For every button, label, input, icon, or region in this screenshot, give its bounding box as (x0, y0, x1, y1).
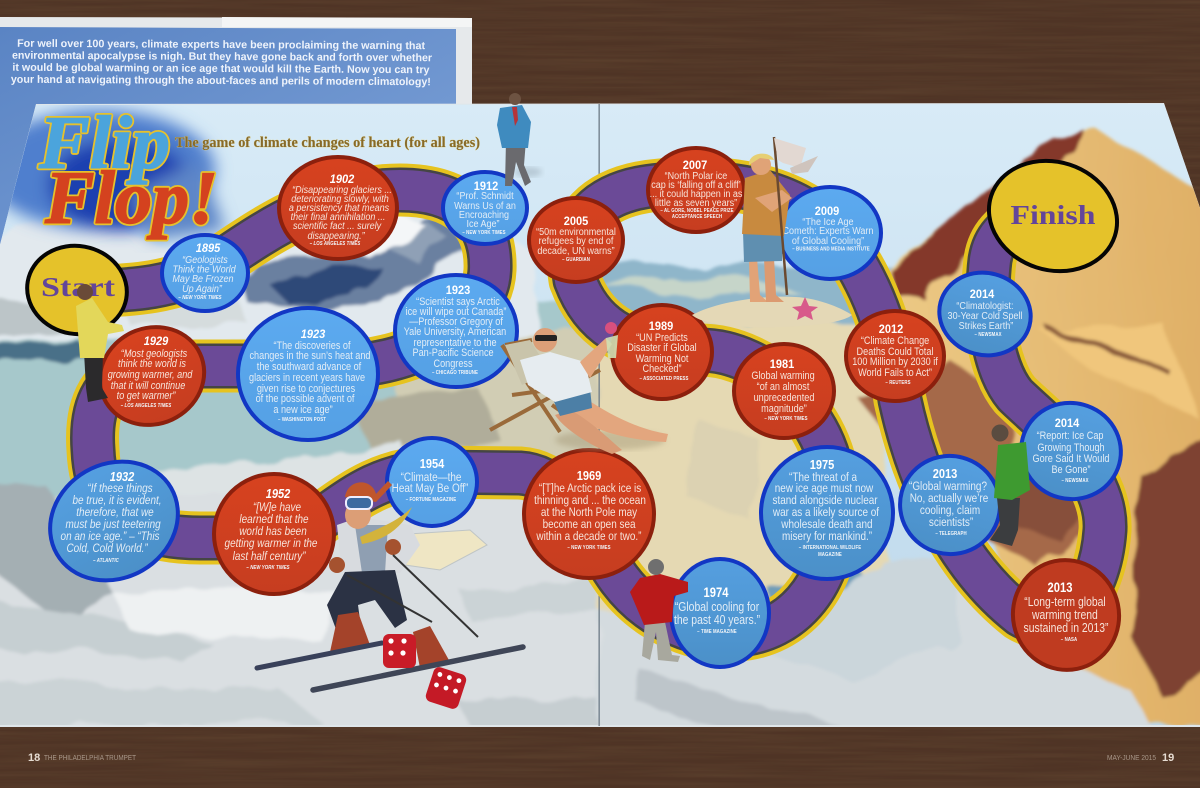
space: 1954: Heat May Be Off” (392, 482, 469, 495)
space: 1912: Ice Age” (466, 218, 500, 230)
space: 2013 cooling: cooling, claim (920, 504, 980, 517)
space: 2005: refugees by end of (539, 235, 614, 247)
space: 1923 lower: glaciers in recent years have (249, 372, 365, 384)
footer: right folio: MAY-JUNE 2015 (1107, 753, 1156, 762)
right page mountain (880, 130, 1200, 725)
space: 2009: “The Ice Age (802, 216, 854, 228)
space: 2013 cooling: 2013 (933, 466, 958, 481)
space: 2005: decade, UN warns” (537, 245, 615, 257)
space: 2014 cold spell: “Climatologist: (956, 300, 1014, 312)
space: 1975 (761, 447, 893, 579)
space: 1923 lower: – WASHINGTON POST (278, 417, 326, 422)
space: 2013 warming: sustained in 2013” (1024, 621, 1109, 635)
space: 2005: – GUARDIAN (562, 257, 590, 262)
space: 2012: “Climate Change (861, 335, 930, 347)
space: 1952: last half century” (233, 550, 307, 563)
space: 1975: new ice age must now (775, 482, 873, 495)
space: 2014 cold spell: 2014 (970, 289, 995, 301)
space: 1952: learned that the (239, 513, 309, 526)
space: 1902: – LOS ANGELES TIMES (310, 241, 361, 246)
space: 1952: 1952 (266, 486, 291, 501)
space: 1895: 1895 (196, 243, 221, 255)
space: 2007: “North Polar ice (665, 170, 727, 182)
space: 1932: on an ice age.” – “This (61, 530, 160, 543)
space: 1923 upper: —Professor Gregory of (409, 316, 503, 328)
space: 1923 lower: 1923 (301, 329, 326, 341)
space: 1989: 1989 (649, 321, 673, 333)
space: 1923 upper: 1923 (446, 285, 470, 297)
space: 1975: misery for mankind.” (782, 530, 872, 543)
space: 2014 ice cap: Be Gone” (1051, 464, 1091, 476)
space: 2014 ice cap (1010, 392, 1132, 510)
space: 2014 cold spell: Strikes Earth” (959, 320, 1013, 332)
space: 2009: – BUSINESS AND MEDIA INSTITUTE (792, 246, 870, 252)
introduction paragraph: your hand at navigating through the about-faces and perils of modern climatology! (11, 74, 431, 88)
space: 1912: Warns Us of an (454, 200, 516, 212)
figure: man in green shirt (990, 424, 1030, 546)
title: Flip Flop!: Flop! (44, 157, 218, 240)
space: 1923 lower: given rise to conjectures (257, 383, 355, 395)
space: 2013 cooling (889, 445, 1011, 565)
space: 1954: “Climate—the (401, 471, 461, 484)
finish space: Finish (1010, 200, 1096, 230)
space: 1952: – NEW YORK TIMES (246, 565, 290, 570)
space: 1981: Global warming (751, 370, 815, 382)
space: 1969 (524, 450, 654, 578)
space: 1975: wholesale death and (780, 518, 873, 531)
space: 1989: Warming Not (636, 353, 689, 365)
space: 1902: disappearing.” (307, 230, 365, 242)
space: 1902: “Disappearing glaciers ... (292, 184, 392, 196)
space: 1923 upper: ice will wipe out Canada” (406, 306, 506, 318)
space: 1932 (28, 439, 200, 603)
space: 1895: Up Again” (182, 283, 223, 295)
space: 1923 upper (395, 275, 517, 387)
space: 1952: world has been (239, 525, 307, 538)
space: 2007: ... it could happen in as (650, 188, 742, 200)
space: 1929: that it will continue (111, 380, 186, 392)
space: 1929: growing warmer, and (108, 369, 193, 381)
space: 2013 cooling: scientists” (929, 516, 973, 529)
space: 1981: – NEW YORK TIMES (764, 416, 808, 421)
space: 1912: 1912 (474, 181, 498, 193)
figure: island castaway with flag (692, 137, 852, 327)
space: 1923 lower: changes in the sun’s heat and (250, 350, 370, 362)
space: 1989: “UN Predicts (636, 332, 688, 344)
space: 1969: thinning and ... the ocean (534, 494, 646, 507)
space: 1929: “Most geologists (121, 348, 187, 360)
space: 2012: – REUTERS (885, 380, 911, 385)
space: 1974: the past 40 years.” (674, 613, 760, 627)
space: 2007: – AL GORE, NOBEL PEACE PRIZE (660, 208, 734, 213)
space: 2013 warming: warming trend (1031, 608, 1098, 622)
left page ground (0, 300, 620, 500)
space: 1969: 1969 (577, 468, 602, 483)
footer: left folio: 18 (28, 752, 40, 764)
title: Flip Flop!: Flop! (44, 157, 218, 240)
space: 1923 lower (238, 308, 378, 440)
space: 1989: – ASSOCIATED PRESS (639, 376, 689, 381)
space: 1969: become an open sea (543, 518, 636, 531)
space: 2012 (846, 311, 944, 401)
space: 1923 lower: of the possible advent of (256, 393, 355, 405)
space: 1902: scientific fact ... surely (293, 220, 382, 232)
space: 2009: 2009 (815, 206, 839, 218)
space: 1929 (84, 310, 220, 442)
space: 1989: Checked” (642, 363, 682, 375)
space: 2013 cooling: – TELEGRAPH (935, 531, 967, 536)
footer: left folio (28, 752, 136, 764)
space: 2012: World Fails to Act” (858, 367, 932, 379)
space: 1902 (279, 157, 397, 259)
space: 1929: think the world is (118, 358, 186, 370)
space: 1969: “[T]he Arctic pack ice is (539, 482, 642, 495)
icon: die one (383, 634, 416, 668)
space: 1952: getting warmer in the (225, 537, 317, 550)
space: 1912: – NEW YORK TIMES (462, 230, 506, 235)
space: 1981: magnitude” (761, 403, 807, 415)
space: 2014 cold spell (930, 262, 1040, 366)
title backdrop glow (0, 110, 225, 240)
space: 2014 ice cap: Growing Though (1037, 442, 1105, 454)
space: 2013 warming: “Long-term global (1024, 595, 1106, 609)
space: 1912 (443, 172, 527, 244)
space: 1923 upper: – CHICAGO TRIBUNE (432, 370, 478, 375)
back magazine sheet with introduction (0, 17, 472, 250)
figure: man in red jacket (630, 559, 688, 662)
space: 1954 (387, 438, 477, 526)
space: 1981 (734, 344, 834, 438)
space: 2007: 2007 (683, 160, 707, 172)
space: 2005: 2005 (564, 216, 589, 228)
space: 2013 warming: 2013 (1048, 580, 1072, 595)
space: 1989: Disaster if Global (627, 342, 697, 354)
space: 1932: therefore, that we (76, 506, 154, 519)
space: 1981: 1981 (770, 359, 795, 371)
space: 1932: be true, it is evident, (72, 494, 162, 507)
space: 2013 cooling: No, actually we’re (910, 492, 988, 505)
footer: left folio: THE PHILADELPHIA TRUMPET (44, 753, 136, 762)
space: 1923 upper: representative to the (413, 337, 497, 349)
space: 1974 (671, 559, 769, 667)
space: 2005 (529, 198, 623, 282)
space: 1929: to get warmer” (117, 390, 176, 402)
space: 2007: ACCEPTANCE SPEECH (672, 214, 723, 219)
introduction paragraph: environmental apocalypse is nigh. But they have gone back and forth over whether (12, 50, 433, 64)
space: 1975: – INTERNATIONAL WILDLIFE (799, 545, 861, 550)
space: 1974: – TIME MAGAZINE (697, 629, 737, 634)
space: 1975: “The threat of a (789, 471, 858, 484)
space: 1974: 1974 (704, 585, 728, 600)
space: 1969: – NEW YORK TIMES (567, 545, 611, 550)
space: 1969: within a decade or two.” (535, 530, 642, 543)
space: 2009: Cometh: Experts Warn (783, 225, 873, 237)
space: 2009 (779, 187, 881, 279)
space: 1952 (214, 474, 334, 594)
introduction paragraph: it would be global warming or an ice age that would kill the Earth. Now you can try (12, 62, 429, 76)
space: 1923 upper: “Scientist says Arctic (416, 296, 500, 308)
space: 1902: deteriorating slowly, with (291, 193, 389, 205)
space: 2009: of Global Cooling” (792, 235, 864, 247)
space: 1923 lower: a new ice age” (273, 404, 333, 416)
space: 1902: 1902 (330, 174, 355, 186)
space: 1932: – ATLANTIC (93, 558, 119, 563)
space: 1895: May Be Frozen (172, 273, 234, 285)
figure: man on beach chair (490, 322, 668, 454)
space: 1902: their final annihilation ... (291, 211, 385, 223)
introduction paragraph: For well over 100 years, climate experts have been proclaiming the warning that (17, 38, 426, 52)
finish space (974, 145, 1132, 287)
space: 2013 cooling: “Global warming? (909, 480, 987, 493)
subtitle: The game of climate changes of heart (for all ages) (175, 135, 480, 151)
space: 1895: Think the World (172, 264, 236, 276)
space: 2013 warming: – NASA (1061, 637, 1078, 642)
footer: right folio (1107, 752, 1174, 764)
space: 1932: “If these things (87, 482, 153, 495)
space: 1974: “Global cooling for (675, 600, 759, 614)
space: 1923 upper: Pan-Pacific Science (412, 347, 494, 359)
title: Flip Flop! (38, 102, 218, 240)
space: 2012: 100 Million by 2030 if (852, 356, 938, 368)
space: 1954: 1954 (420, 456, 445, 471)
start space: Start (41, 272, 115, 302)
space: 2007: cap is ‘falling off a cliff’ (651, 179, 741, 191)
space: 1912: Encroaching (459, 209, 509, 221)
footer: right folio: 19 (1162, 752, 1174, 764)
space: 2012: Deaths Could Total (857, 346, 933, 358)
space: 1895: “Geologists (182, 254, 228, 266)
space: 1932: 1932 (110, 469, 135, 484)
space: 1975: MAGAZINE (818, 552, 842, 557)
space: 2014 ice cap: – NEWSMAX (1062, 478, 1089, 483)
space: 1923 upper: Yale University, American (404, 326, 506, 338)
space: 1969: at the North Pole may (541, 506, 638, 519)
right page sea and sand (598, 265, 918, 335)
title: Flip Flop!: Flip (38, 102, 170, 185)
space: 1923 lower: “The discoveries of (274, 340, 351, 352)
space: 2014 ice cap: 2014 (1055, 418, 1080, 430)
icon: die two (424, 666, 468, 710)
page spine (598, 104, 600, 726)
figure: skier (257, 481, 523, 690)
space: 1975: stand alongside nuclear (772, 494, 878, 507)
space: 1932: Cold, Cold World.” (66, 542, 149, 555)
figure: businessman in blue (497, 93, 542, 186)
space: 1952: “[W]e have (253, 501, 301, 514)
space: 1895 (162, 235, 248, 311)
space: 2007 (648, 148, 744, 232)
space: 2014 cold spell: 30-Year Cold Spell (948, 310, 1022, 322)
figure: man in yellow jacket (76, 284, 124, 402)
space: 1902: a persistency that means (289, 202, 389, 214)
space: 1923 lower: the southward advance of (257, 361, 361, 373)
space: 1981: “of an almost (757, 381, 810, 393)
introduction paragraph (11, 38, 433, 88)
space: 2005: “50m environmental (536, 226, 616, 238)
space: 1975: war as a likely source of (772, 506, 880, 519)
space: 1932: must be just teetering (66, 518, 161, 531)
space: 2012: 2012 (879, 324, 903, 336)
title: Flip Flop!: Flip (38, 102, 170, 185)
space: 2014 ice cap: Gore Said It Would (1033, 453, 1109, 465)
space: 1912: “Prof. Schmidt (456, 190, 514, 202)
space: 1989 (612, 305, 712, 399)
space: 2014 ice cap: “Report: Ice Cap (1037, 430, 1104, 442)
purple game track (77, 183, 1105, 636)
space: 2013 warming (1003, 550, 1129, 680)
space: 1981: unprecedented (754, 392, 814, 404)
space: 1929: – LOS ANGELES TIMES (121, 403, 172, 408)
space: 2007: little as seven years” (655, 197, 737, 209)
space: 1923 upper: Congress (433, 358, 473, 370)
bottom right snow (594, 590, 1151, 725)
space: 2014 cold spell: – NEWSMAX (975, 332, 1002, 337)
space: 1895: – NEW YORK TIMES (178, 295, 222, 300)
space: 1929: 1929 (144, 336, 169, 348)
space: 1975: 1975 (810, 457, 835, 472)
space: 1954: – FORTUNE MAGAZINE (406, 497, 456, 502)
start space (20, 238, 134, 342)
